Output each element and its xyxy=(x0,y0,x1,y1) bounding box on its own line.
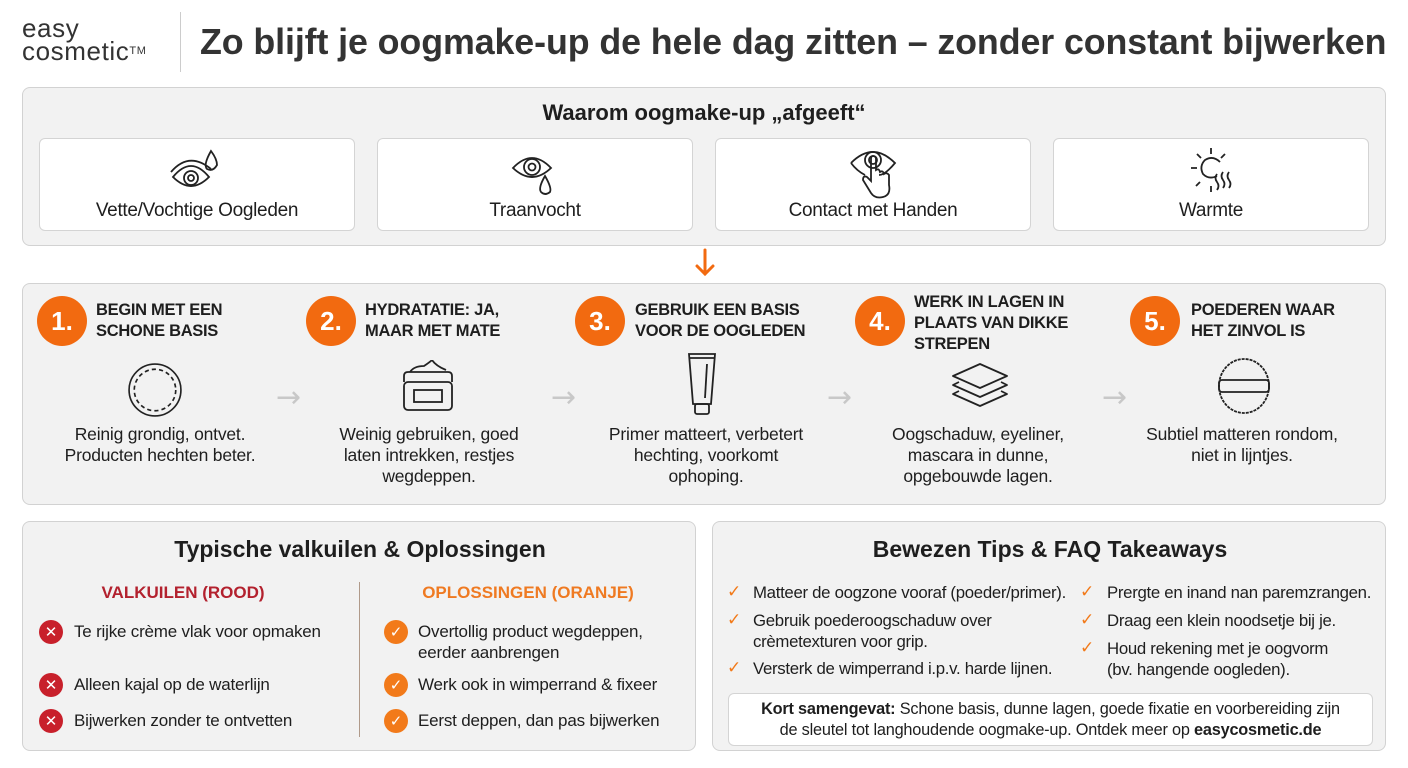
arrow: 3-4: → xyxy=(827,380,852,415)
tips list: Versterk de wimperrand i.p.v. harde lijnen. xyxy=(753,659,1052,678)
tips list: ✓ xyxy=(727,582,741,602)
logo xyxy=(22,13,146,66)
step 5: 5. xyxy=(1144,306,1166,336)
summary box: de sleutel tot langhoudende oogmake-up. Ontdek meer op easycosmetic.de xyxy=(780,721,1321,739)
step 4: 4. xyxy=(869,306,891,336)
step 3: hechting, voorkomt xyxy=(634,445,778,465)
tips list: Houd rekening met je oogvorm xyxy=(1107,639,1328,658)
heading: Typische valkuilen & Oplossingen xyxy=(174,536,546,562)
arrow: 1-2: → xyxy=(276,380,301,415)
step 5: POEDEREN WAAR xyxy=(1191,301,1335,319)
tips list: Prergte en inand nan paremzrangen. xyxy=(1107,583,1371,602)
card: warmte: Warmte xyxy=(1179,200,1243,221)
column: oplossingen: OPLOSSINGEN (ORANJE) xyxy=(422,583,634,602)
step 1: 1. xyxy=(51,306,73,336)
tips list: crèmetexturen voor grip. xyxy=(753,632,928,651)
step 3 xyxy=(575,296,805,486)
arrow: down xyxy=(695,248,715,276)
card: vette oogleden xyxy=(39,138,355,231)
step 5 xyxy=(1130,296,1338,465)
card: warmte xyxy=(1053,138,1369,231)
step 4 xyxy=(855,293,1068,486)
tips list: ✓ xyxy=(1080,638,1094,658)
column: valkuilen: Bijwerken zonder te ontvetten xyxy=(74,711,292,730)
tips list: Draag een klein noodsetje bij je. xyxy=(1107,611,1336,630)
column: oplossingen: ✓ xyxy=(390,712,402,730)
column: oplossingen: eerder aanbrengen xyxy=(418,643,559,662)
step 1: Producten hechten beter. xyxy=(65,445,255,465)
step 3: GEBRUIK EEN BASIS xyxy=(635,301,800,319)
card: contact met handen: Contact met Handen xyxy=(789,200,957,221)
step 4: mascara in dunne, xyxy=(908,445,1048,465)
heading: causes: Waarom oogmake-up „afgeeft“ xyxy=(542,100,866,125)
summary box: Kort samengevat: Schone basis, dunne lagen, goede fixatie en voorbereiding zijn xyxy=(761,700,1340,718)
tips list: ✓ xyxy=(1080,582,1094,602)
column: oplossingen: ✓ xyxy=(390,676,402,694)
step 5: niet in lijntjes. xyxy=(1191,445,1293,465)
column: oplossingen: Overtollig product wegdeppen, xyxy=(418,622,643,641)
column: valkuilen: ✕ xyxy=(45,676,57,694)
tips list: Gebruik poederoogschaduw over xyxy=(753,611,992,630)
step 1 xyxy=(37,296,255,465)
panel: tips xyxy=(712,521,1386,751)
card: vette oogleden: Vette/Vochtige Oogleden xyxy=(96,200,298,221)
panel: steps xyxy=(22,283,1386,505)
card: traanvocht: Traanvocht xyxy=(489,200,581,221)
step 2: Weinig gebruiken, goed xyxy=(339,424,519,444)
column: valkuilen: ✕ xyxy=(45,712,57,730)
step 3: ophoping. xyxy=(668,466,744,486)
tips list: ✓ xyxy=(727,658,741,678)
column: oplossingen: ✓ xyxy=(390,623,402,641)
step 3: Primer matteert, verbetert xyxy=(609,424,803,444)
step 3: VOOR DE OOGLEDEN xyxy=(635,322,805,340)
step 4: PLAATS VAN DIKKE xyxy=(914,314,1068,332)
heading: Bewezen Tips & FAQ Takeaways xyxy=(873,536,1227,562)
column: oplossingen xyxy=(384,583,659,733)
step 1: Reinig grondig, ontvet. xyxy=(75,424,245,444)
panel: valkuilen xyxy=(22,521,696,751)
card: contact met handen xyxy=(715,138,1031,231)
column: valkuilen: Te rijke crème vlak voor opmaken xyxy=(74,622,321,641)
step 4: Oogschaduw, eyeliner, xyxy=(892,424,1064,444)
column: oplossingen: Eerst deppen, dan pas bijwerken xyxy=(418,711,659,730)
tips list xyxy=(727,582,1371,679)
step 2: 2. xyxy=(320,306,342,336)
arrow: 4-5: → xyxy=(1102,380,1127,415)
step 2: HYDRATATIE: JA, xyxy=(365,301,499,319)
column: valkuilen: Alleen kajal op de waterlijn xyxy=(74,675,270,694)
step 5: HET ZINVOL IS xyxy=(1191,322,1305,340)
column: valkuilen: ✕ xyxy=(45,623,57,641)
step 1: BEGIN MET EEN xyxy=(96,301,222,319)
tips list: ✓ xyxy=(1080,610,1094,630)
column: valkuilen: VALKUILEN (ROOD) xyxy=(101,583,265,602)
step 4: opgebouwde lagen. xyxy=(903,466,1053,486)
step 2 xyxy=(306,296,519,486)
step 2: laten intrekken, restjes xyxy=(344,445,514,465)
step 4: WERK IN LAGEN IN xyxy=(914,293,1064,311)
column: oplossingen: Werk ook in wimperrand & fixeer xyxy=(418,675,657,694)
step 3: 3. xyxy=(589,306,611,336)
step 2: MAAR MET MATE xyxy=(365,322,500,340)
tips list: ✓ xyxy=(727,610,741,630)
title: Zo blijft je oogmake-up de hele dag zitten – zonder constant bijwerken xyxy=(200,22,1386,62)
logo: easy xyxy=(22,13,79,43)
card: traanvocht xyxy=(377,138,693,231)
logo: cosmeticTM xyxy=(22,36,146,66)
column: valkuilen xyxy=(39,583,321,733)
step 4: STREPEN xyxy=(914,335,990,353)
tips list: (bv. hangende oogleden). xyxy=(1107,660,1290,679)
tips list: Matteer de oogzone vooraf (poeder/primer). xyxy=(753,583,1066,602)
panel: causes xyxy=(22,87,1386,246)
step 2: wegdeppen. xyxy=(382,466,476,486)
step 1: SCHONE BASIS xyxy=(96,322,218,340)
step 5: Subtiel matteren rondom, xyxy=(1146,424,1338,444)
summary box xyxy=(728,693,1373,746)
arrow: 2-3: → xyxy=(551,380,576,415)
